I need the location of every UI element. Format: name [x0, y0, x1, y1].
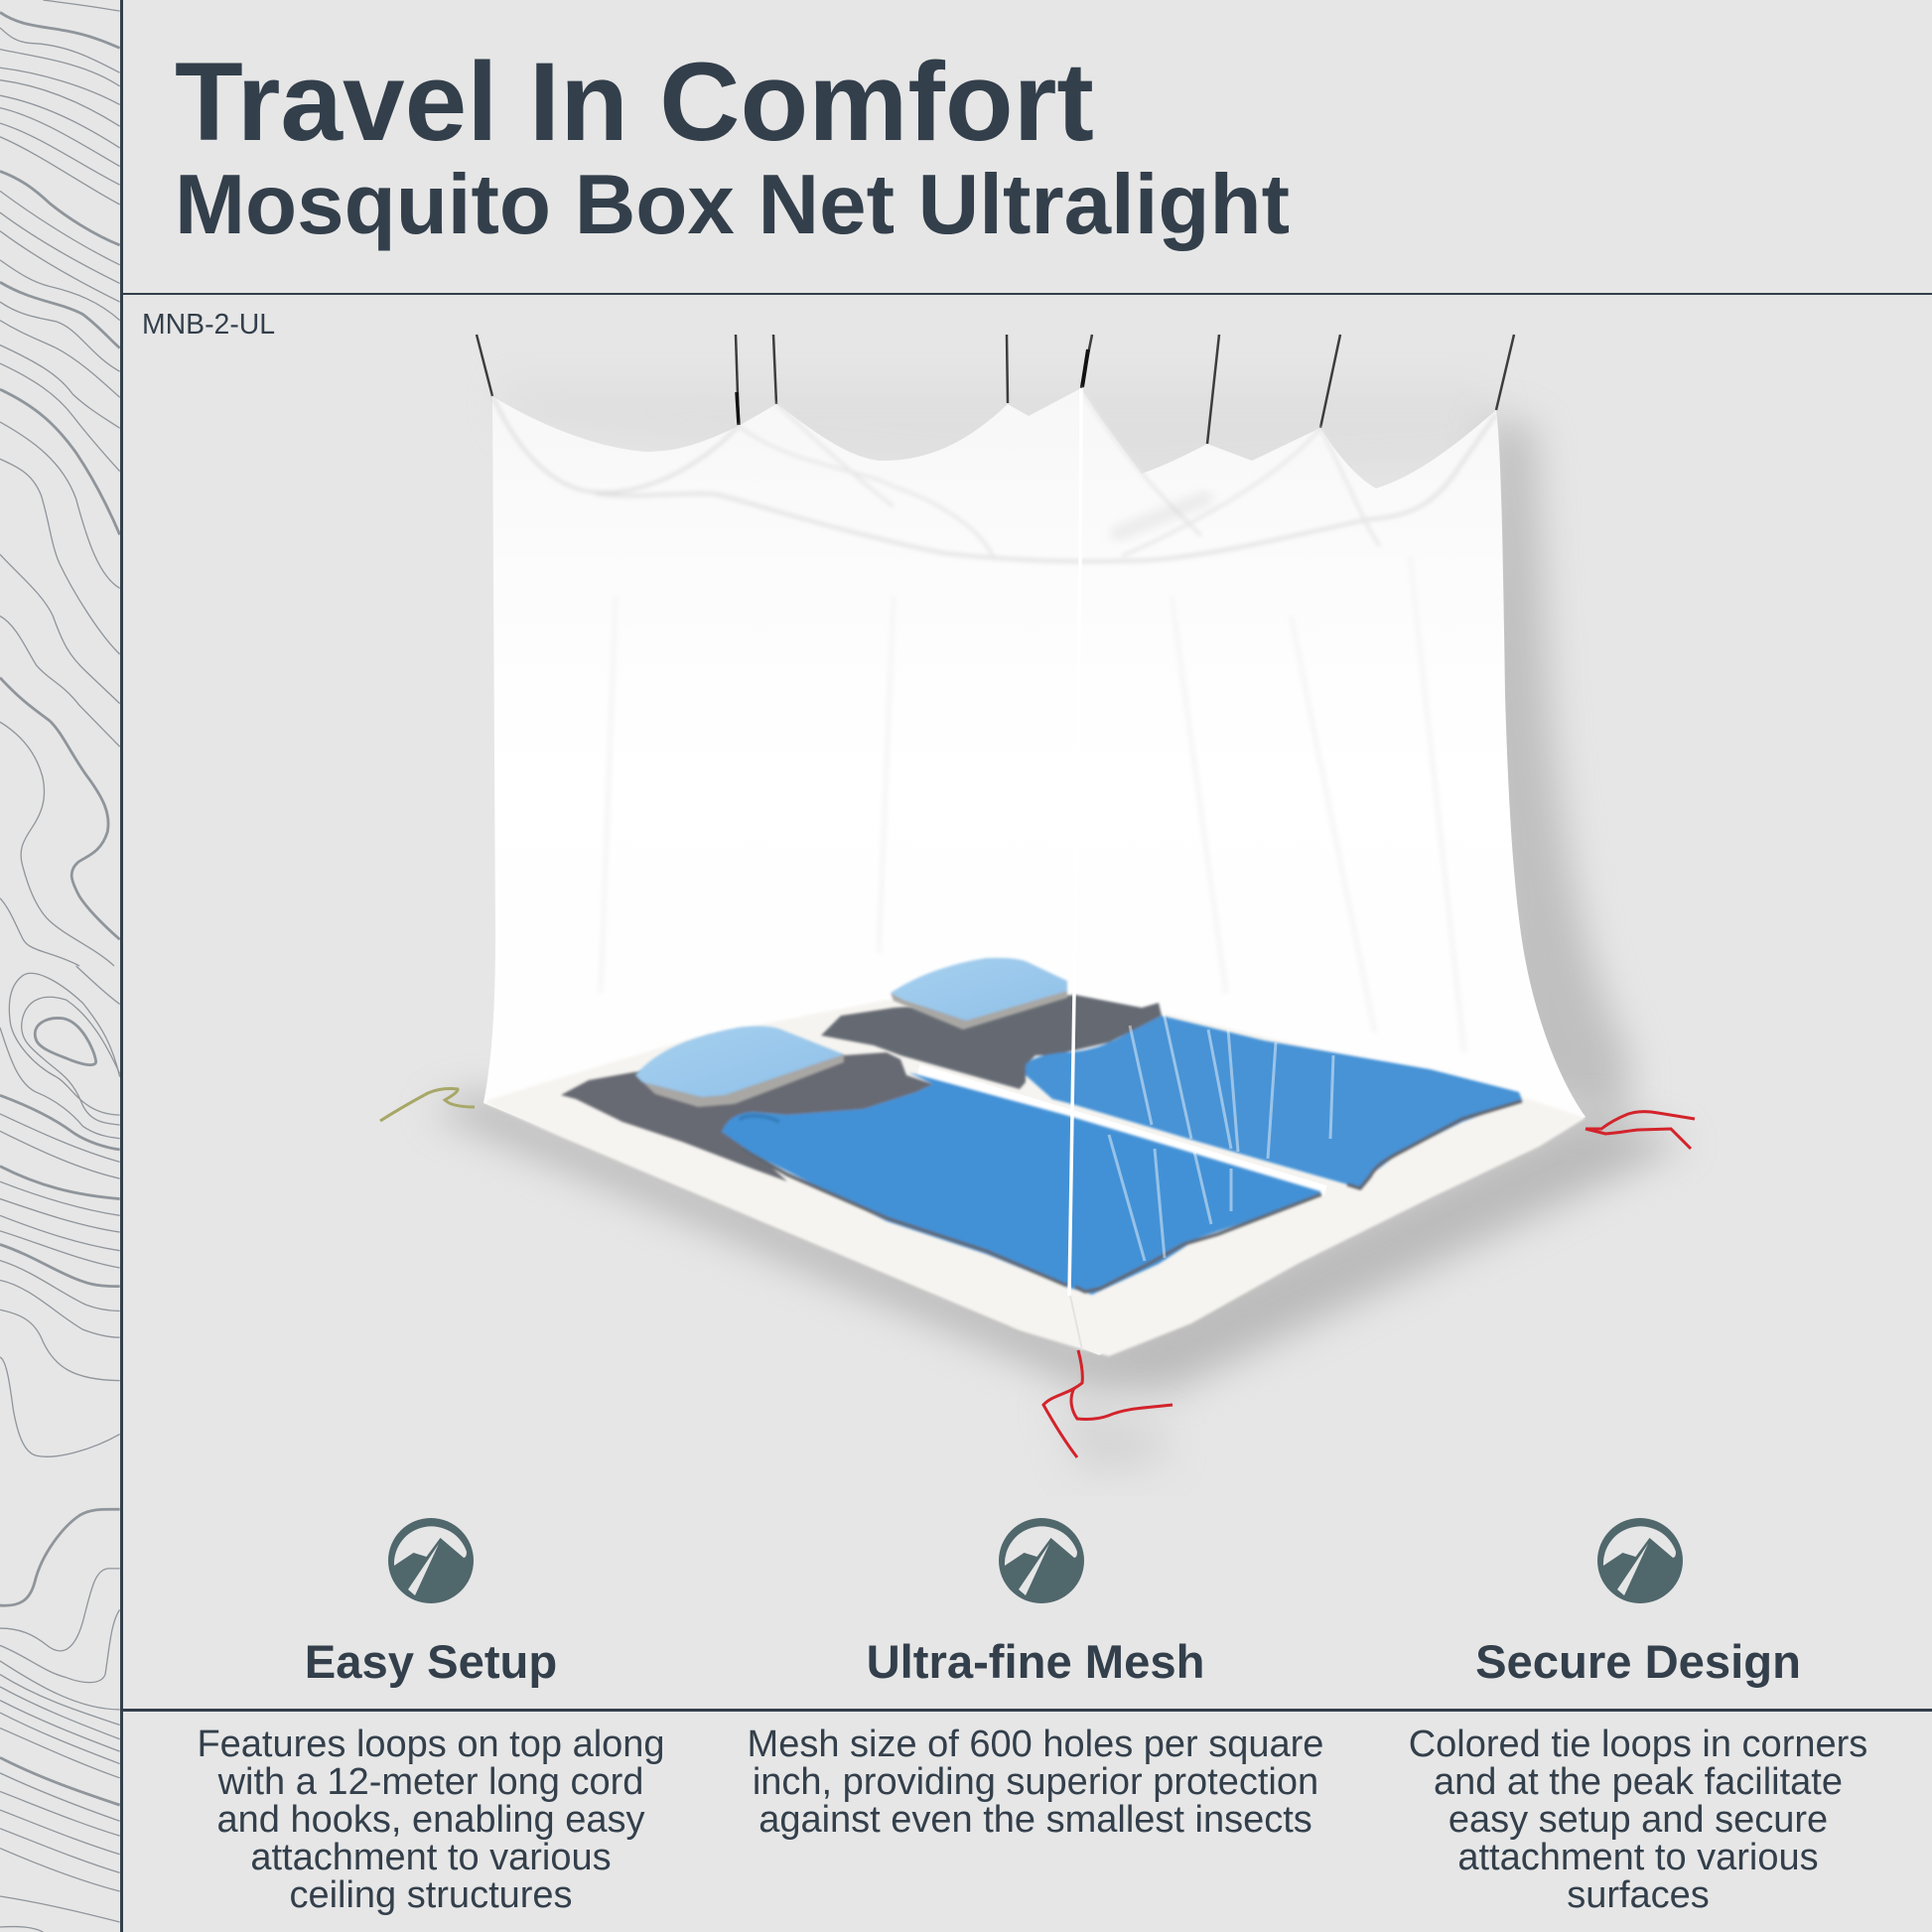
heading: ultra-fine mesh: Ultra-fine Mesh — [867, 1636, 1204, 1689]
text: ultra-fine mesh: against even the smallest insects — [759, 1799, 1312, 1841]
hanging cords — [477, 335, 1514, 444]
title: Travel In Comfort — [175, 39, 1094, 164]
text: secure design — [1409, 1724, 1867, 1916]
horizontal rule: features — [121, 1709, 1932, 1712]
text: easy setup: with a 12-meter long cord — [218, 1761, 643, 1803]
topographic contour pattern — [0, 0, 120, 1932]
feature: ultra-fine mesh icon — [999, 1518, 1084, 1603]
net top swag folds — [492, 388, 1496, 561]
feature: easy setup icon — [388, 1518, 474, 1603]
net body — [483, 388, 1586, 1355]
text: easy setup: ceiling structures — [289, 1874, 573, 1916]
text: secure design: easy setup and secure — [1449, 1799, 1828, 1841]
text: easy setup: and hooks, enabling easy — [216, 1799, 645, 1841]
text: secure design: and at the peak facilitate — [1434, 1761, 1843, 1803]
text: ultra-fine mesh — [748, 1724, 1323, 1841]
tie loop: olive — [380, 1088, 475, 1121]
sleeping bag: front — [561, 1052, 1321, 1295]
heading: easy setup: Easy Setup — [305, 1636, 557, 1689]
text: secure design: attachment to various — [1457, 1837, 1819, 1878]
text: secure design: Colored tie loops in corners — [1409, 1724, 1867, 1765]
text: easy setup: attachment to various — [250, 1837, 612, 1878]
gap between bags — [918, 1070, 1325, 1191]
text: ultra-fine mesh: inch, providing superior protection — [753, 1761, 1318, 1803]
horizontal rule: header — [121, 292, 1932, 295]
text: easy setup: Features loops on top along — [197, 1724, 665, 1765]
feature: secure design icon — [1597, 1518, 1683, 1603]
net faint vertical folds — [601, 556, 1464, 1052]
text: secure design: surfaces — [1567, 1874, 1710, 1916]
floor of net — [483, 1000, 1586, 1356]
text: ultra-fine mesh: Mesh size of 600 holes per square — [748, 1724, 1323, 1765]
net threads — [1069, 388, 1333, 1350]
vertical rule — [120, 0, 123, 1932]
shadows — [427, 382, 1688, 1474]
subtitle: Mosquito Box Net Ultralight — [175, 158, 1290, 252]
sleeping bag: back — [821, 995, 1522, 1188]
tie loops: red — [1043, 1112, 1695, 1457]
pillows — [635, 958, 1067, 1107]
text: easy setup — [197, 1724, 665, 1916]
product code: MNB-2-UL — [142, 309, 275, 341]
heading: secure design: Secure Design — [1475, 1636, 1801, 1689]
